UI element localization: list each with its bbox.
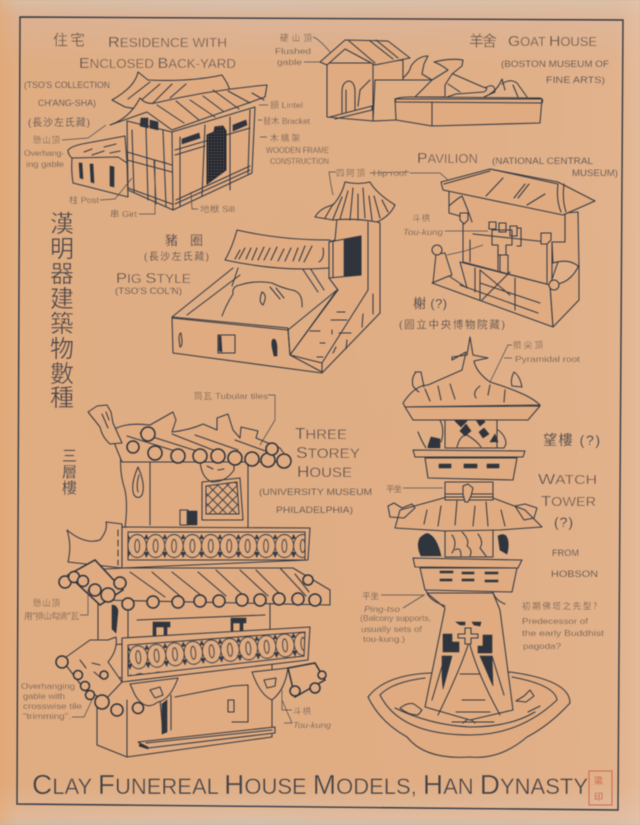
vertical main title [50, 211, 74, 412]
three storey heading: THREE [295, 426, 347, 443]
top storey [121, 445, 248, 528]
residence labels: 懸山頂 [33, 134, 60, 146]
goat house labels: gable [277, 57, 302, 67]
house body [127, 107, 255, 210]
residence collection note: (TSO'S COLLECTION [24, 80, 110, 91]
pig sty heading: (TSO'S COL'N) [115, 286, 182, 297]
residence labels: 串 Girt [110, 209, 138, 219]
artist seal stamp: 印 [594, 791, 603, 802]
pavilion brackets [460, 213, 551, 244]
panel: residence with enclosed back-yard [24, 32, 329, 219]
first balcony [67, 522, 122, 568]
three storey heading: (UNIVERSITY MUSEUM [259, 487, 372, 498]
vertical main title: 數 [50, 361, 74, 388]
three storey labels: Tubular tiles [215, 391, 268, 401]
three storey labels: 筒瓦 [194, 390, 212, 402]
lower room [445, 530, 493, 557]
goat house heading: 羊舍 [469, 33, 497, 50]
residence labels: Overhang- [24, 148, 64, 158]
panel: three storey house [21, 390, 372, 757]
pig sty heading [115, 233, 209, 297]
lower roof [395, 497, 542, 531]
three storey labels [21, 390, 331, 730]
second roof [88, 568, 330, 605]
watch tower heading: 望樓 (?) [543, 432, 600, 448]
watch tower heading: (?) [554, 514, 573, 530]
upper balcony [425, 458, 517, 480]
three storey labels: gable with [23, 691, 65, 701]
residence heading: RESIDENCE WITH [108, 34, 227, 51]
watch tower labels: 初期佛塔之先型? [522, 600, 597, 612]
pig [222, 282, 302, 316]
residence labels [24, 100, 329, 219]
panel: goat house [275, 32, 609, 126]
lower eave tiles [56, 656, 326, 716]
three storey labels: crosswise tile [23, 701, 82, 711]
watch tower drawing [368, 337, 570, 757]
hip roof label: Hip roof [373, 168, 408, 178]
three storey drawing [56, 405, 330, 757]
door step [138, 727, 275, 748]
watch tower labels: the early Buddhist [522, 628, 605, 638]
panel: watch tower [360, 337, 605, 757]
pavilion drawing [432, 169, 595, 327]
artist seal stamp: 梁 [594, 775, 603, 786]
three storey heading: 層 [62, 464, 77, 481]
goat shapes [403, 56, 432, 80]
goat house labels: Flushed [275, 46, 311, 56]
watch tower labels: Predecessor of [522, 616, 589, 626]
bottom title: CLAY FUNEREAL HOUSE MODELS, HAN DYNASTY [32, 769, 588, 800]
watch tower heading [538, 432, 600, 580]
three storey labels: 斗栱 [293, 705, 311, 717]
residence heading: 住宅 [53, 32, 85, 49]
tower door [329, 236, 361, 278]
vertical main title: 物 [50, 336, 74, 363]
pavilion heading [417, 150, 618, 179]
three storey heading: 樓 [62, 480, 77, 497]
residence heading: ENCLOSED BACK-YARD [79, 55, 236, 72]
neck [445, 482, 493, 500]
goat house heading [469, 33, 609, 86]
three storey labels: 用"排山勾滴"瓦 [24, 610, 79, 622]
three storey labels: Tou-kung [293, 720, 331, 730]
watch tower heading: FROM [552, 548, 579, 559]
shelter roof [225, 230, 330, 269]
vertical main title: 器 [50, 261, 74, 288]
goat house heading: GOAT HOUSE [508, 33, 597, 50]
hip roof label: 四阿頂 [336, 167, 365, 179]
residence labels: 替木 Bracket [263, 116, 311, 126]
watch tower labels: Pyramidal root [515, 354, 581, 364]
door [207, 126, 226, 184]
pig sty heading: PIG STYLE [116, 270, 191, 287]
vertical main title: 建 [50, 286, 74, 313]
three storey labels: "trimming". [23, 711, 71, 721]
pavilion labels: Tou-kung [403, 227, 443, 237]
residence labels: 柱 Post [69, 195, 100, 205]
vertical main title: 築 [50, 311, 74, 338]
pavilion labels [399, 173, 505, 331]
watch tower heading: HOBSON [551, 569, 598, 580]
pavilion labels: (圖立中央博物院藏) [399, 318, 505, 331]
pig sty heading: (長沙左氏藏) [144, 250, 209, 263]
residence labels: 地栿 Sill [200, 204, 235, 214]
pig sty heading: 豬 圈 [165, 233, 203, 248]
pavilion labels: 榭 (?) [413, 296, 447, 311]
panel: pavilion [399, 150, 618, 331]
front roof [110, 85, 267, 130]
top roof [403, 337, 540, 407]
hip roof label [329, 167, 409, 195]
three storey labels: 懸山頂 [33, 597, 60, 609]
top roof and ridge ornaments [113, 412, 290, 462]
vertical main title: 漢 [50, 211, 74, 238]
goat house heading: (BOSTON MUSEUM OF [501, 59, 609, 70]
ground storey [97, 660, 272, 757]
residence labels: CONSTRUCTION [270, 156, 329, 166]
top tile ends [127, 427, 291, 468]
watch tower labels: 攢尖頂 [513, 339, 543, 351]
bowl [368, 672, 570, 757]
openings [179, 333, 235, 353]
watch tower heading: TOWER [541, 493, 596, 510]
watch tower labels: usually sets of [361, 624, 423, 634]
corbels [130, 668, 288, 706]
watch tower labels: 平坐 [362, 590, 379, 602]
residence drawing [68, 72, 267, 210]
three storey labels: Overhanging [21, 681, 75, 691]
watch tower labels: (Balcony supports, [360, 613, 431, 623]
windows [140, 118, 247, 144]
middle storey [98, 592, 270, 645]
goat house heading: FINE ARTS) [546, 75, 605, 86]
watch tower labels: Ping-tso [364, 604, 400, 614]
residence collection note: CH'ANG-SHA) [38, 98, 96, 109]
three storey heading: PHILADELPHIA) [276, 505, 353, 516]
goat house labels: 硬山頂 [280, 32, 312, 44]
residence collection note: (長沙左氏藏) [28, 116, 90, 129]
pavilion heading: PAVILION [417, 150, 478, 167]
residence labels: ing gable [26, 159, 64, 169]
goat house drawing [320, 40, 543, 126]
pavilion heading: (NATIONAL CENTRAL [492, 156, 593, 167]
vertical main title: 明 [50, 236, 74, 263]
second balcony [62, 637, 122, 700]
low enclosure [395, 99, 542, 126]
watch tower labels [360, 339, 605, 651]
back roof [112, 72, 232, 115]
pavilion heading: MUSEUM) [572, 168, 618, 179]
goat house labels [275, 32, 331, 67]
panel: pig sty [115, 167, 409, 373]
three storey heading: STOREY [296, 445, 361, 462]
residence collection note [24, 80, 110, 129]
pig sty drawing [172, 182, 395, 373]
vertical main title: 種 [50, 385, 74, 412]
watch tower heading: WATCH [538, 471, 597, 488]
three storey heading: 三 [62, 448, 77, 465]
residence heading [53, 32, 236, 72]
tower thatched roof [315, 182, 395, 222]
upper room [445, 410, 497, 448]
lower balcony [420, 568, 517, 592]
watch tower labels: tou-kung.) [363, 634, 405, 644]
residence labels: 木構架 [270, 132, 300, 144]
artist seal stamp [589, 771, 612, 805]
residence labels: 額 Lintel [270, 100, 303, 110]
tower base [425, 593, 513, 720]
watch tower labels: pagoda? [523, 641, 561, 651]
residence labels: WOODEN FRAME [266, 145, 329, 155]
watch tower labels: 平坐 [386, 483, 402, 495]
three storey heading [62, 426, 372, 516]
back-yard wing [68, 136, 127, 163]
second roof tile ends [59, 560, 321, 610]
three storey heading: HOUSE [297, 464, 352, 481]
pavilion base [433, 253, 452, 283]
pavilion labels: 斗栱 [412, 212, 430, 224]
